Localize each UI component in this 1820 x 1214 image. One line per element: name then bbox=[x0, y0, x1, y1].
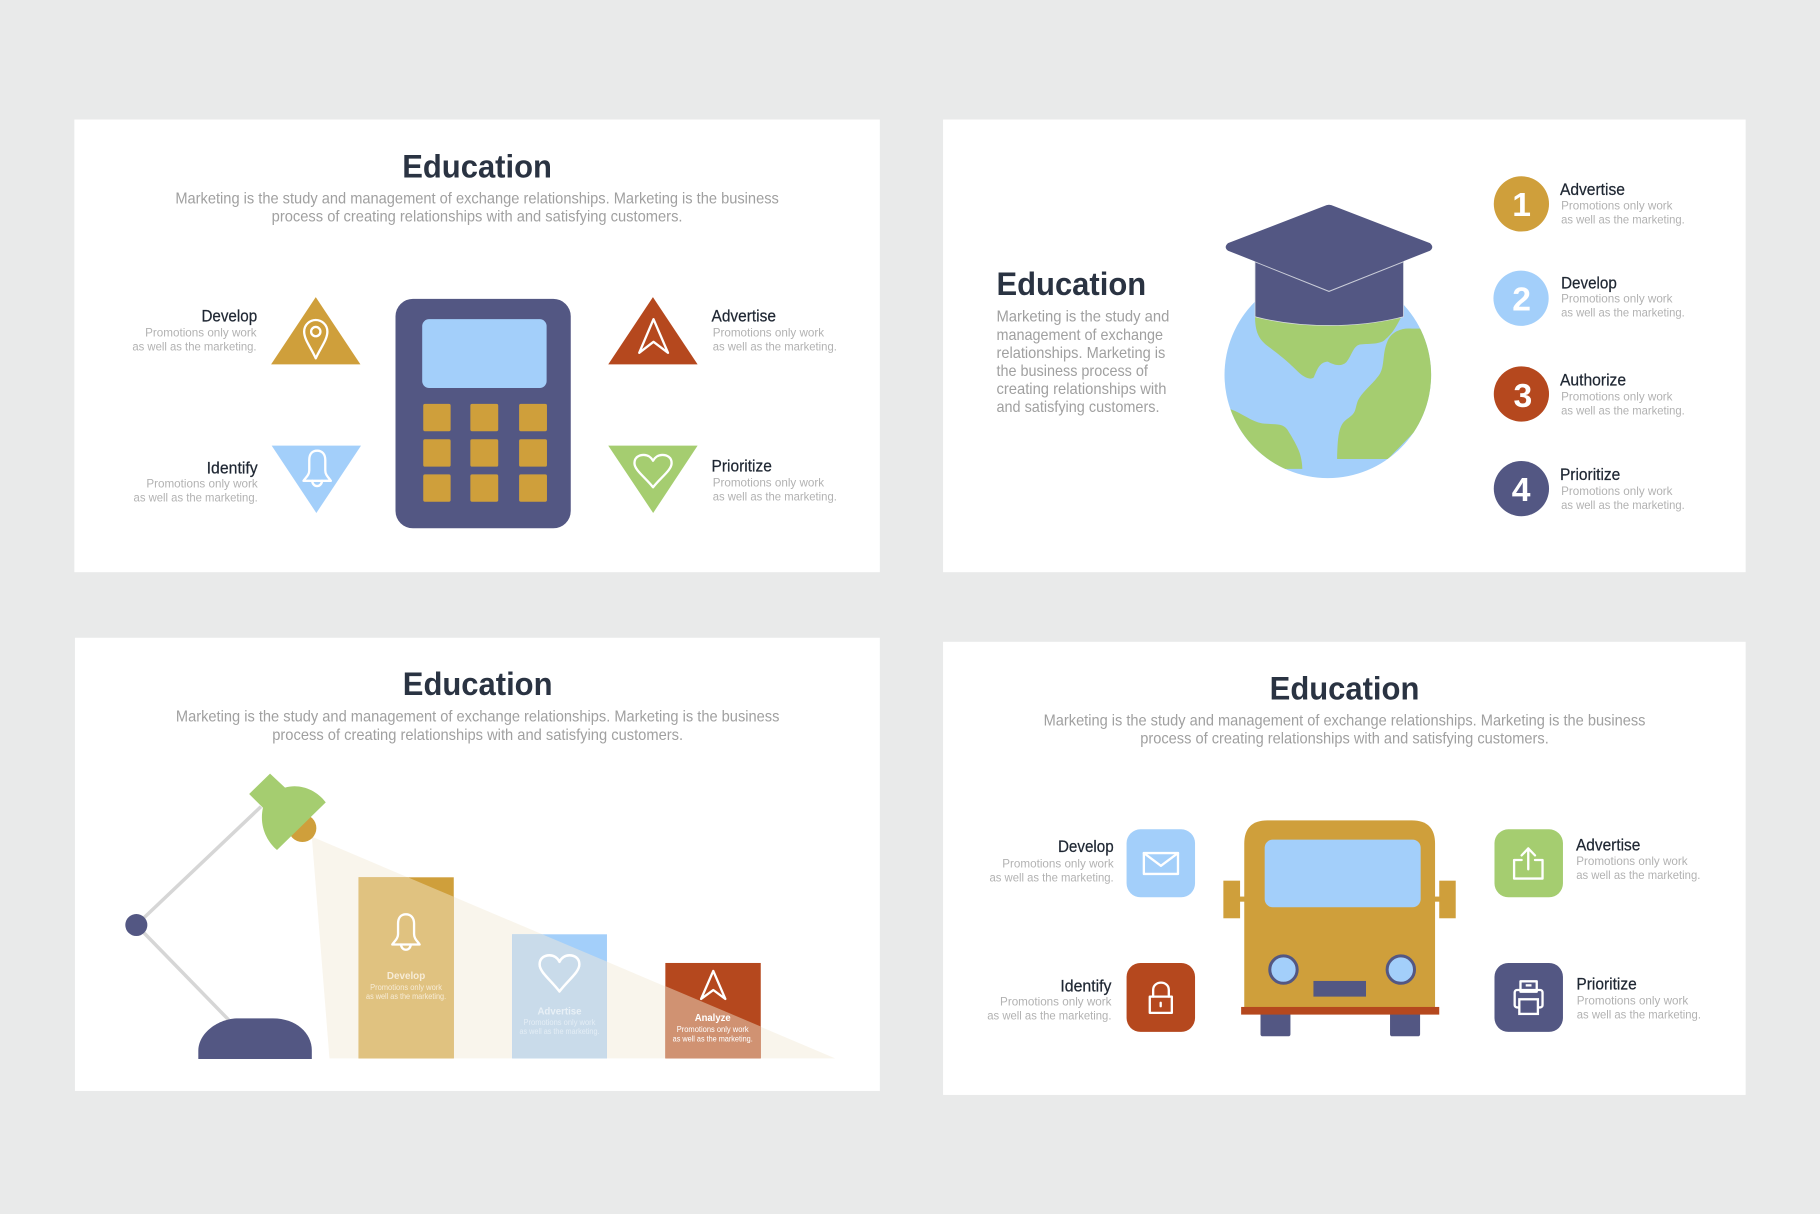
step 4: as well as the marketing. bbox=[1561, 498, 1685, 512]
step 2: Promotions only work bbox=[1561, 292, 1673, 306]
desk lamp bbox=[125, 774, 326, 1059]
graduation cap bbox=[1226, 205, 1432, 326]
subtitle: process of creating relationships with and satisfying customers. bbox=[272, 209, 683, 226]
paragraph: the business process of bbox=[996, 363, 1149, 380]
paragraph: and satisfying customers. bbox=[996, 399, 1160, 416]
bar: develop: as well as the marketing. bbox=[366, 992, 446, 1001]
panel: globe slide bbox=[943, 120, 1746, 572]
label: prioritize: Promotions only work bbox=[713, 476, 825, 490]
label: develop: as well as the marketing. bbox=[132, 340, 257, 354]
panel: bus slide bbox=[943, 642, 1746, 1095]
bar: develop: Develop bbox=[387, 971, 425, 982]
bar: develop bbox=[358, 877, 454, 1058]
step 2 bbox=[1493, 271, 1685, 326]
bar: advertise: as well as the marketing. bbox=[519, 1027, 600, 1036]
subtitle: Marketing is the study and management of exchange relationships. Marketing is the business bbox=[175, 191, 779, 208]
step 4 bbox=[1494, 461, 1685, 516]
bus bbox=[1223, 820, 1456, 1036]
paragraph: Marketing is the study and bbox=[996, 309, 1169, 326]
step 4: Promotions only work bbox=[1561, 484, 1673, 498]
label: advertise: Promotions only work bbox=[1576, 854, 1688, 868]
icon: printer bbox=[1494, 963, 1563, 1032]
label: prioritize: as well as the marketing. bbox=[713, 490, 837, 504]
subtitle: process of creating relationships with and satisfying customers. bbox=[1140, 730, 1549, 747]
icon: pin triangle bbox=[271, 297, 360, 364]
label: prioritize bbox=[1576, 975, 1701, 1021]
label: advertise: Promotions only work bbox=[713, 326, 825, 340]
label: identify: Identify bbox=[207, 460, 259, 478]
label: identify bbox=[987, 978, 1112, 1023]
label: identify: as well as the marketing. bbox=[987, 1009, 1111, 1023]
subtitle bbox=[1044, 713, 1646, 747]
step 1: as well as the marketing. bbox=[1561, 212, 1685, 226]
bar: analyze: as well as the marketing. bbox=[673, 1034, 753, 1043]
subtitle: Marketing is the study and management of exchange relationships. Marketing is the business bbox=[1044, 713, 1646, 730]
icon: navigation triangle bbox=[608, 297, 698, 364]
step 1 bbox=[1494, 176, 1685, 232]
label: identify: as well as the marketing. bbox=[134, 490, 258, 504]
paragraph: creating relationships with bbox=[996, 381, 1166, 398]
step 4: Prioritize bbox=[1560, 466, 1620, 484]
step 4: 4 bbox=[1512, 472, 1531, 509]
bar: analyze: Analyze bbox=[695, 1013, 731, 1024]
panel: desk lamp slide bbox=[75, 638, 880, 1091]
title: Education bbox=[403, 666, 553, 702]
paragraph: relationships. Marketing is bbox=[996, 345, 1165, 362]
step 1: Promotions only work bbox=[1561, 198, 1673, 212]
bar: analyze bbox=[665, 963, 761, 1058]
subtitle: Marketing is the study and management of exchange relationships. Marketing is the business bbox=[176, 709, 780, 726]
label: prioritize bbox=[712, 458, 837, 504]
label: prioritize: Prioritize bbox=[712, 458, 772, 476]
step 2: 2 bbox=[1512, 281, 1531, 318]
panel: calculator slide bbox=[74, 120, 880, 572]
icon: mail bbox=[1127, 829, 1195, 897]
icon: bell triangle bbox=[272, 446, 361, 513]
icon: heart triangle bbox=[608, 446, 698, 513]
label: advertise: as well as the marketing. bbox=[713, 340, 837, 354]
label: advertise bbox=[1576, 837, 1700, 882]
paragraph bbox=[996, 309, 1169, 416]
label: develop bbox=[132, 307, 257, 354]
label: prioritize: Prioritize bbox=[1576, 975, 1637, 993]
bar: develop: Promotions only work bbox=[370, 983, 443, 992]
label: identify: Promotions only work bbox=[146, 476, 259, 490]
label: advertise bbox=[712, 307, 837, 354]
bar: advertise: Promotions only work bbox=[524, 1018, 596, 1027]
step 3: Promotions only work bbox=[1561, 390, 1673, 404]
title: Education bbox=[996, 266, 1146, 302]
bar: analyze: Promotions only work bbox=[677, 1025, 750, 1034]
label: develop: Promotions only work bbox=[145, 326, 257, 340]
step 3: Authorize bbox=[1560, 372, 1626, 390]
step 2: as well as the marketing. bbox=[1561, 306, 1685, 320]
bar: advertise bbox=[512, 934, 607, 1058]
label: identify bbox=[134, 460, 259, 504]
paragraph: management of exchange bbox=[996, 327, 1163, 344]
step 3: as well as the marketing. bbox=[1561, 404, 1685, 418]
step 1: Advertise bbox=[1560, 181, 1625, 199]
step 2: Develop bbox=[1561, 274, 1617, 292]
calculator bbox=[396, 299, 571, 528]
subtitle: process of creating relationships with and satisfying customers. bbox=[272, 727, 683, 744]
label: advertise: Advertise bbox=[1576, 837, 1640, 855]
label: develop bbox=[990, 838, 1115, 884]
label: develop: Develop bbox=[201, 307, 257, 325]
label: develop: Develop bbox=[1058, 838, 1114, 856]
icon: share bbox=[1494, 829, 1563, 897]
label: advertise: Advertise bbox=[712, 307, 776, 325]
step 1: 1 bbox=[1512, 187, 1531, 224]
label: develop: as well as the marketing. bbox=[990, 870, 1114, 884]
globe bbox=[1224, 302, 1432, 478]
step 3: 3 bbox=[1513, 378, 1532, 415]
label: identify: Identify bbox=[1060, 978, 1112, 996]
label: identify: Promotions only work bbox=[1000, 995, 1112, 1009]
title: Education bbox=[402, 149, 552, 185]
label: advertise: as well as the marketing. bbox=[1576, 868, 1700, 882]
bar: advertise: Advertise bbox=[537, 1006, 582, 1017]
subtitle bbox=[175, 191, 779, 226]
title: Education bbox=[1270, 670, 1419, 706]
icon: lock bbox=[1127, 963, 1195, 1032]
step 3 bbox=[1494, 366, 1685, 422]
light beam bbox=[312, 837, 835, 1058]
subtitle bbox=[176, 709, 780, 744]
label: prioritize: Promotions only work bbox=[1577, 993, 1689, 1007]
label: prioritize: as well as the marketing. bbox=[1577, 1007, 1701, 1021]
label: develop: Promotions only work bbox=[1002, 856, 1115, 870]
